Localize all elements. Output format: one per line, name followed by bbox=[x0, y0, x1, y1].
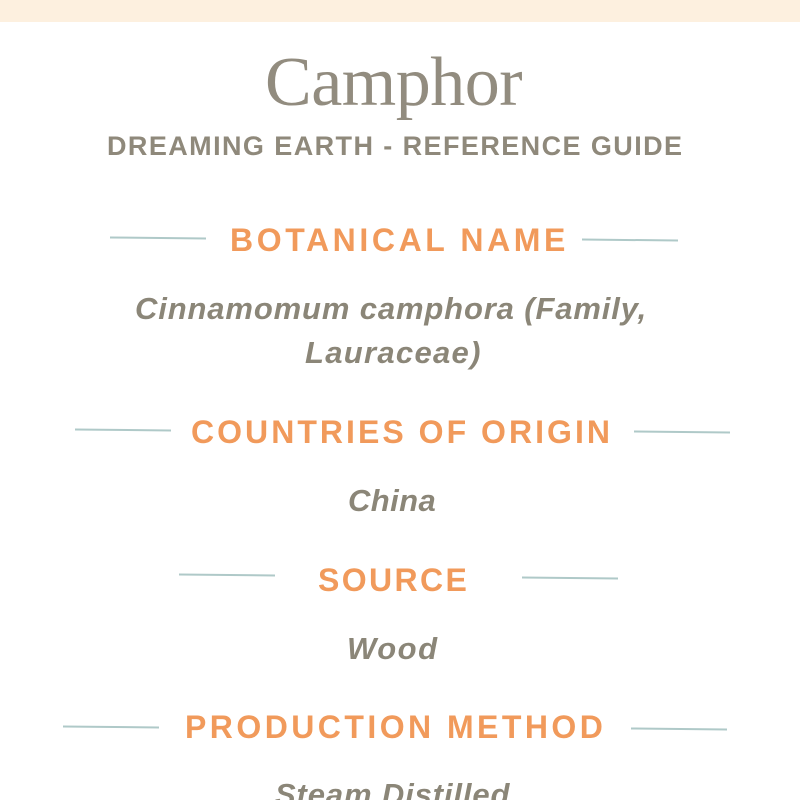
title: Camphor bbox=[265, 44, 522, 121]
text: countries value: China bbox=[348, 483, 436, 518]
divider: left bbox=[63, 725, 159, 729]
text: botanical name value line 2: Lauraceae) bbox=[305, 335, 482, 370]
divider: right bbox=[631, 727, 727, 731]
heading: production method: PRODUCTION METHOD bbox=[185, 709, 606, 745]
heading: source: SOURCE bbox=[318, 562, 469, 598]
section: source bbox=[179, 562, 618, 598]
divider: right bbox=[522, 576, 618, 580]
section: botanical name bbox=[110, 222, 678, 258]
text: botanical name value: Cinnamomum camphora (Family, bbox=[135, 291, 647, 326]
text: source value: Wood bbox=[347, 631, 439, 666]
divider: right bbox=[582, 238, 678, 242]
top banner bbox=[0, 0, 800, 22]
subtitle: DREAMING EARTH - REFERENCE GUIDE bbox=[107, 131, 683, 161]
divider: left bbox=[75, 428, 171, 432]
heading: botanical name: BOTANICAL NAME bbox=[230, 222, 569, 258]
divider: right bbox=[634, 430, 730, 434]
heading: countries of origin: COUNTRIES OF ORIGIN bbox=[191, 414, 613, 450]
divider: left bbox=[110, 236, 206, 240]
section: production method bbox=[63, 709, 727, 745]
divider: left bbox=[179, 573, 275, 577]
section: countries of origin bbox=[75, 414, 730, 450]
